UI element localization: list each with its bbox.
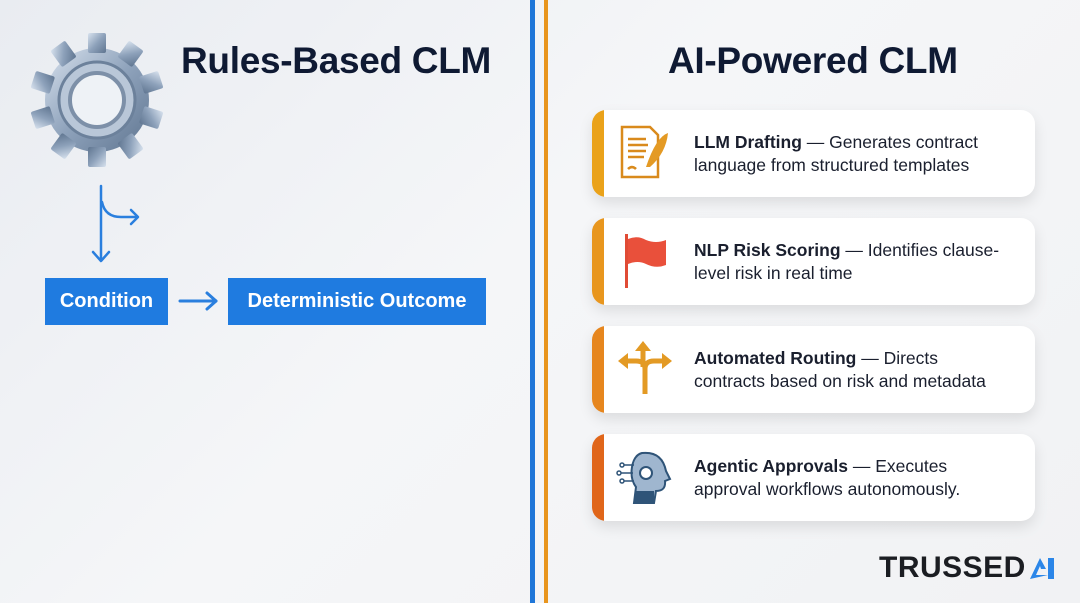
card: automated routing: Automated Routing — Directs: [694, 348, 938, 368]
icon: gear: [31, 33, 163, 167]
icon: AI head: [616, 452, 672, 504]
card: NLP risk scoring: [592, 218, 1035, 305]
box: condition: Condition: [60, 290, 153, 312]
box: deterministic outcome: Deterministic Outcome: [248, 290, 466, 312]
card: NLP risk scoring: level risk in real time: [694, 263, 853, 283]
card: LLM drafting: language from structured templates: [694, 155, 969, 175]
panel: rules-based: [31, 33, 491, 325]
divider lines: [530, 0, 535, 603]
arrow: condition to outcome: [178, 291, 218, 311]
title: AI-powered CLM: AI-Powered CLM: [668, 40, 958, 81]
card: LLM drafting: [592, 110, 1035, 197]
logo: TRUSSED AI: TRUSSED: [879, 551, 1026, 584]
card: agentic approvals: [592, 434, 1035, 521]
card: LLM drafting: LLM Drafting — Generates contract: [694, 132, 978, 152]
card: automated routing: contracts based on risk and metadata: [694, 371, 986, 391]
title: rules-based CLM: Rules-Based CLM: [181, 40, 491, 81]
card: NLP risk scoring: NLP Risk Scoring — Identifies clause-: [694, 240, 999, 260]
card: automated routing: [592, 326, 1035, 413]
arrow: flow branch: [92, 184, 140, 262]
icon: routing arrows: [618, 341, 672, 394]
icon: document quill: [620, 126, 668, 178]
box: condition: [45, 278, 168, 325]
card: agentic approvals: Agentic Approvals — Executes: [694, 456, 947, 476]
box: deterministic outcome: [228, 278, 486, 325]
icon: red flag: [625, 234, 666, 288]
card: agentic approvals: approval workflows autonomously.: [694, 479, 960, 499]
